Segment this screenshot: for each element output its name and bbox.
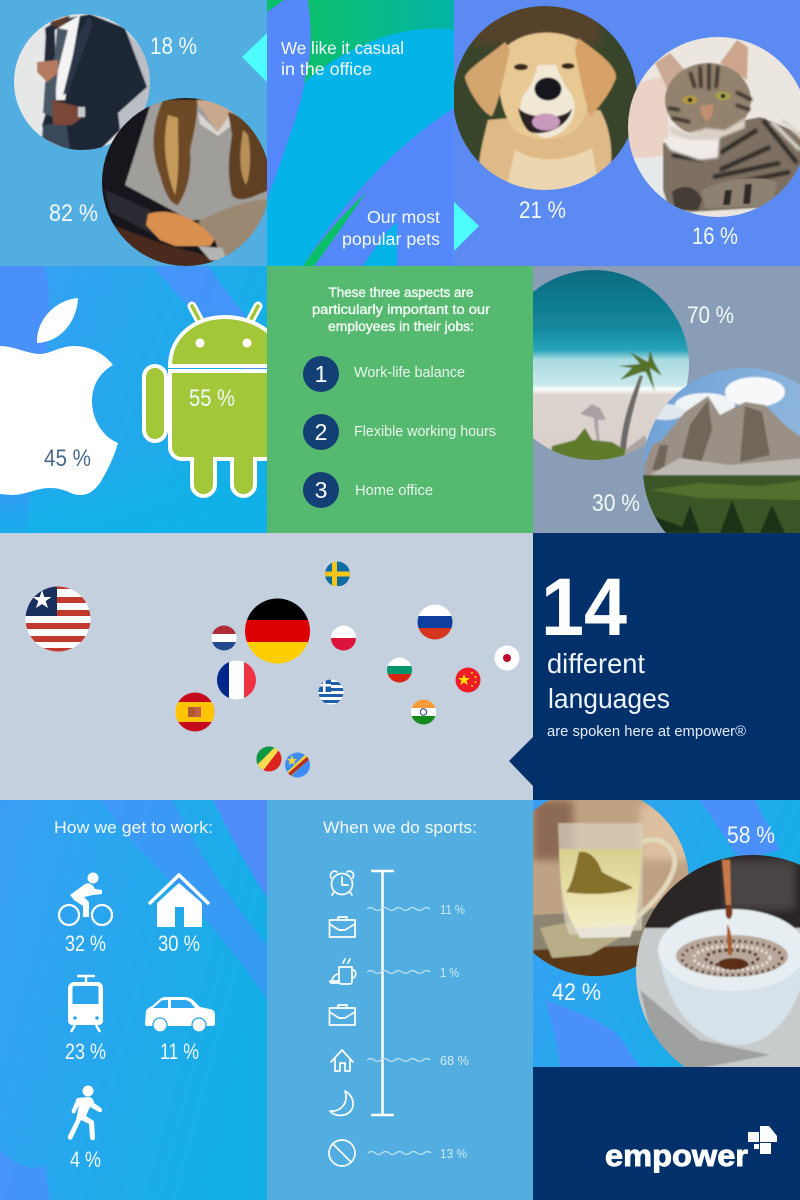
flag: Germany (245, 598, 310, 664)
label: 4 percent: 4 % (70, 1147, 101, 1172)
label: 18 percent: 18 % (150, 33, 197, 60)
text: our most popular pets: Our most (367, 207, 440, 227)
icon: car (145, 997, 215, 1032)
item: home office: 3 (315, 477, 327, 503)
panel: flags (0, 533, 533, 800)
text: our most popular pets: popular pets (342, 229, 440, 249)
text: different languages: different (547, 648, 645, 679)
wave line: 1 percent (367, 970, 430, 974)
flag: Liberia / USA style (25, 586, 91, 653)
icon: coffee and snack (330, 959, 356, 984)
label: 55 percent: 55 % (189, 385, 235, 412)
icon: no sports sign (329, 1140, 355, 1166)
photo: tabby cat (625, 35, 800, 220)
panel: languages (509, 533, 800, 800)
flag: Russia (417, 604, 453, 640)
panel: dress code (0, 0, 275, 275)
icon: briefcase morning (330, 917, 355, 937)
icon: tram (68, 976, 103, 1032)
panel: holiday preference (533, 266, 800, 533)
label: 30 percent: 30 % (592, 490, 640, 517)
flag: France (216, 660, 258, 700)
flag: Greece (318, 679, 344, 705)
icon: bicycle (59, 872, 112, 925)
photo: golden retriever (454, 6, 636, 190)
heading: when we do sports: When we do sports: (323, 818, 477, 837)
item: flexible working hours: 2 (315, 419, 327, 445)
label: 13 percent sport: 13 % (440, 1146, 467, 1161)
photo: mountains (640, 365, 800, 537)
flag: Poland (331, 625, 357, 651)
photo: man in suit (14, 14, 150, 150)
heading: three aspects: particularly important to our (312, 302, 491, 317)
flag: Bulgaria (387, 657, 413, 683)
heading: three aspects: These three aspects are (328, 285, 474, 300)
text: we like it casual: We like it casual (281, 38, 404, 58)
icon: alarm clock (331, 871, 353, 895)
flag: India (411, 699, 437, 725)
label: 68 percent sport: 68 % (440, 1053, 469, 1068)
label: 23 percent: 23 % (65, 1039, 106, 1064)
label: 45 percent: 45 % (44, 445, 91, 472)
panel: phones (0, 266, 285, 533)
icon: house outline (331, 1050, 353, 1071)
label: 32 percent: 32 % (65, 931, 106, 956)
item: work-life balance: Work-life balance (354, 365, 465, 381)
label: 1 percent sport: 1 % (440, 965, 459, 980)
text: are spoken here at empower: are spoken here at empower® (547, 724, 746, 740)
label: 11 percent: 11 % (160, 1039, 199, 1064)
number: 14: 14 (541, 562, 627, 653)
logo: empower (605, 1126, 777, 1173)
flag: DR Congo (285, 752, 311, 778)
flag: Spain (175, 692, 215, 732)
heading: three aspects: employees in their jobs: (328, 319, 474, 334)
arrow: pointing left to dress code (242, 33, 267, 82)
icon: walking person (68, 1086, 102, 1140)
icon: android robot (144, 306, 285, 496)
item: work-life balance (303, 356, 465, 392)
heading: how we get to work: How we get to work: (54, 818, 213, 837)
logo: empower: empower (605, 1138, 748, 1173)
icon: briefcase afternoon (330, 1005, 355, 1025)
flag: Japan (494, 646, 520, 670)
text: we like it casual: in the office (281, 59, 372, 79)
panel: section captions (267, 0, 454, 266)
label: 30 percent: 30 % (158, 931, 200, 956)
label: 16 percent: 16 % (692, 223, 738, 250)
label: 21 percent: 21 % (519, 197, 566, 224)
arrow: pointing right to pets (454, 202, 479, 251)
flag: China (455, 667, 481, 693)
label: 82 percent: 82 % (49, 200, 98, 227)
icon: crescent moon (330, 1091, 353, 1115)
photo: woman in casual sweater (102, 98, 267, 266)
panel: tea or coffee (500, 785, 800, 1075)
arrow: pointing left to flags (509, 737, 533, 786)
flag: Republic of Congo (256, 746, 282, 772)
flag: Sweden (325, 561, 350, 586)
item: home office: Home office (355, 483, 433, 499)
panel: logo (533, 1067, 800, 1200)
item: home office (303, 472, 433, 508)
photo: glass of tea (500, 785, 695, 980)
icon: house (149, 875, 209, 927)
label: 11 percent sport: 11 % (440, 902, 465, 917)
panel: sports timing (267, 800, 533, 1200)
panel: three aspects (267, 266, 533, 533)
item: flexible working hours (303, 414, 496, 450)
panel: commute (0, 800, 267, 1200)
wave line: 68 percent (367, 1058, 430, 1062)
flag: Netherlands (211, 625, 237, 651)
wave line: 13 percent (368, 1152, 431, 1154)
photo: cup of coffee (630, 850, 800, 1075)
text: different languages: languages (548, 683, 670, 714)
icon: apple logo (0, 298, 118, 495)
wave line: 11 percent (367, 908, 430, 910)
panel: pets (450, 0, 800, 266)
photo: palm beach (533, 270, 689, 460)
label: 70 percent: 70 % (687, 302, 734, 329)
item: flexible working hours: Flexible working hours (354, 424, 496, 440)
label: 42 percent: 42 % (552, 979, 601, 1006)
item: work-life balance: 1 (315, 361, 327, 387)
timeline bar (371, 871, 394, 1115)
label: 58 percent: 58 % (727, 822, 775, 849)
